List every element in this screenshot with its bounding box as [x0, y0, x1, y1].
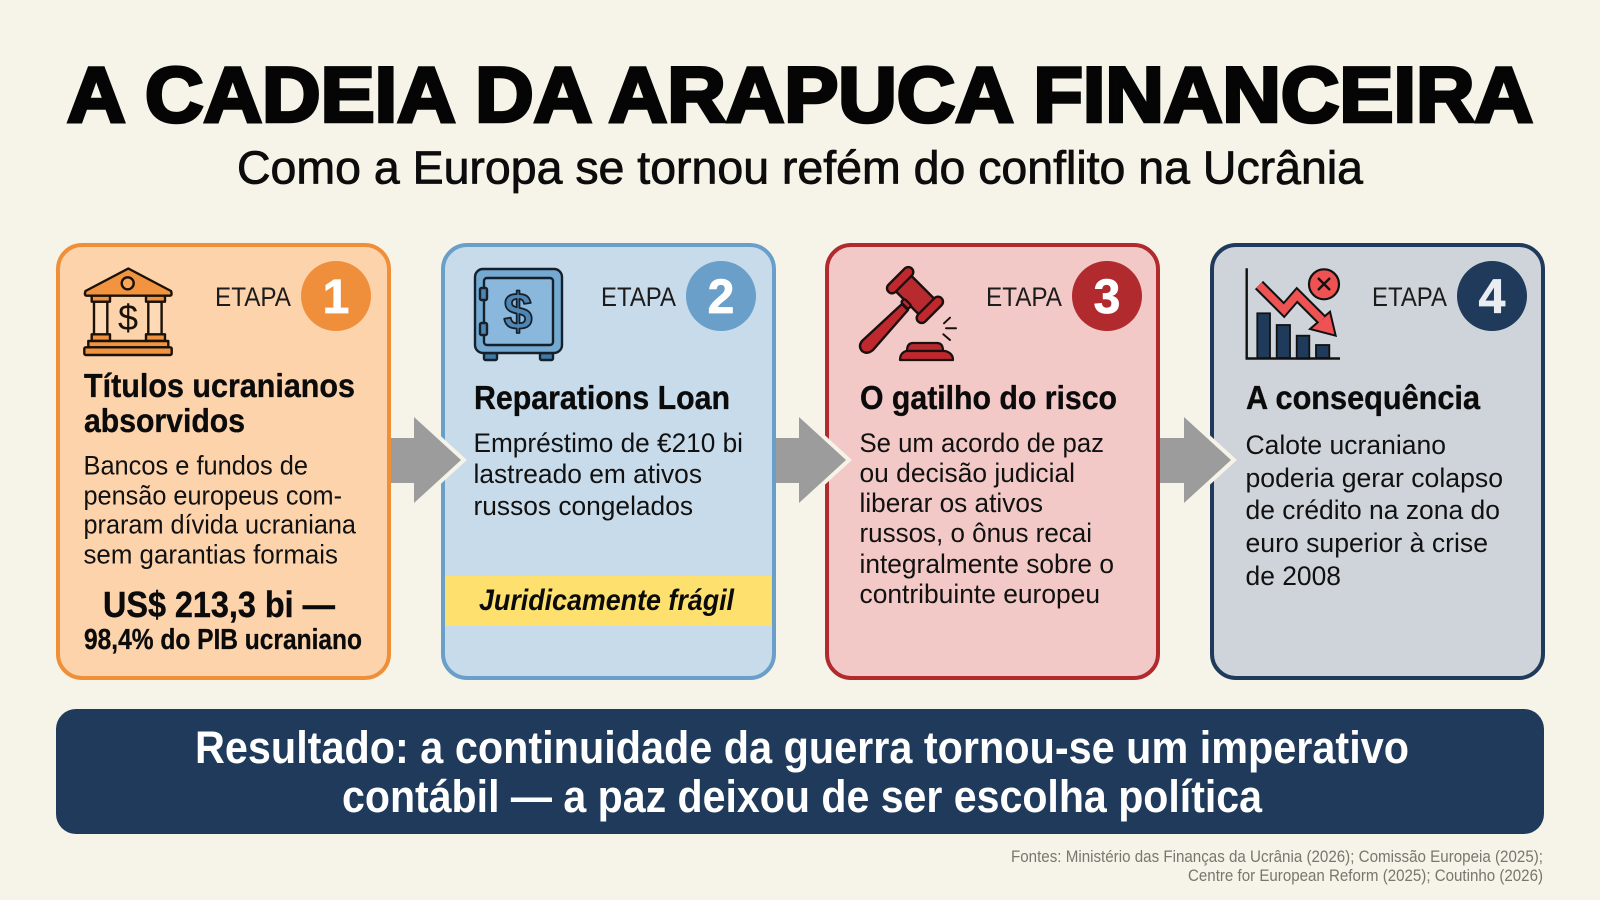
- title: A CADEIA DA ARAPUCA FINANCEIRA: [67, 50, 1533, 138]
- callout band: [445, 576, 771, 626]
- result banner: contábil — a paz deixou de ser escolha política: [342, 771, 1263, 822]
- heading: O gatilho do risco: [860, 379, 1117, 416]
- step number badge: [1457, 261, 1527, 331]
- body text: praram dívida ucraniana: [84, 510, 357, 540]
- step label: ETAPA: [1372, 282, 1447, 312]
- sources: [1011, 847, 1543, 885]
- icon: safe: $: [504, 283, 533, 341]
- icon: gavel: [860, 265, 956, 360]
- body text: euro superior à crise: [1246, 528, 1488, 558]
- panel: etapa 2: [443, 245, 774, 678]
- heading: A consequência: [1246, 379, 1481, 416]
- body text: contribuinte europeu: [860, 579, 1100, 609]
- result banner: [56, 709, 1544, 834]
- body text: ou decisão judicial: [860, 458, 1075, 488]
- panel: etapa 4: [1212, 245, 1543, 678]
- body text: integralmente sobre o: [860, 549, 1114, 579]
- step number badge: [686, 261, 756, 331]
- key figure: 98,4% do PIB ucraniano: [84, 624, 362, 656]
- heading: Reparations Loan: [474, 379, 730, 416]
- result banner: Resultado: a continuidade da guerra tornou-se um imperativo: [195, 722, 1409, 773]
- panel: etapa 3: [827, 245, 1158, 678]
- body text: Se um acordo de paz: [860, 428, 1104, 458]
- arrow: etapa 3 to 4: [1160, 417, 1231, 503]
- sources: Fontes: Ministério das Finanças da Ucrânia (2026); Comissão Europeia (2025);: [1011, 847, 1543, 866]
- body text: [84, 450, 357, 570]
- key figure: US$ 213,3 bi —: [103, 584, 335, 625]
- body text: Calote ucraniano: [1246, 430, 1446, 460]
- subtitle: Como a Europa se tornou refém do conflito na Ucrânia: [237, 142, 1363, 194]
- body text: pensão europeus com-: [84, 480, 342, 510]
- step number badge: [1072, 261, 1142, 331]
- body text: Bancos e fundos de: [84, 450, 308, 480]
- body text: [1246, 430, 1503, 591]
- icon: bank: [84, 268, 172, 355]
- heading: absorvidos: [84, 402, 245, 439]
- body text: [860, 428, 1114, 609]
- body text: russos congelados: [474, 491, 693, 521]
- body text: de crédito na zona do: [1246, 495, 1500, 525]
- heading: [84, 367, 355, 439]
- icon: safe: [475, 269, 562, 360]
- arrow: etapa 1 to 2: [391, 417, 461, 503]
- step number badge: 4: [1479, 271, 1506, 324]
- body text: de 2008: [1246, 561, 1341, 591]
- icon: falling chart: [1247, 268, 1340, 359]
- arrow: etapa 2 to 3: [776, 417, 846, 503]
- step label: ETAPA: [215, 282, 291, 312]
- step label: ETAPA: [986, 282, 1062, 312]
- body text: sem garantias formais: [84, 540, 338, 570]
- body text: liberar os ativos: [860, 488, 1043, 518]
- step label: ETAPA: [601, 282, 676, 312]
- step number badge: 1: [323, 271, 349, 324]
- step number badge: [301, 261, 371, 331]
- heading: Títulos ucranianos: [84, 367, 355, 404]
- icon: bank: $: [118, 297, 138, 338]
- body text: russos, o ônus recai: [860, 518, 1092, 548]
- step number badge: 2: [708, 271, 734, 324]
- step number badge: 3: [1094, 271, 1120, 324]
- panel: etapa 1: [58, 245, 389, 678]
- body text: [474, 428, 743, 521]
- callout band: Juridicamente frágil: [479, 584, 735, 617]
- key figure: [84, 584, 362, 656]
- sources: Centre for European Reform (2025); Coutinho (2026): [1188, 866, 1543, 885]
- body text: Empréstimo de €210 bi: [474, 428, 743, 458]
- body text: lastreado em ativos: [474, 459, 702, 489]
- body text: poderia gerar colapso: [1246, 463, 1503, 493]
